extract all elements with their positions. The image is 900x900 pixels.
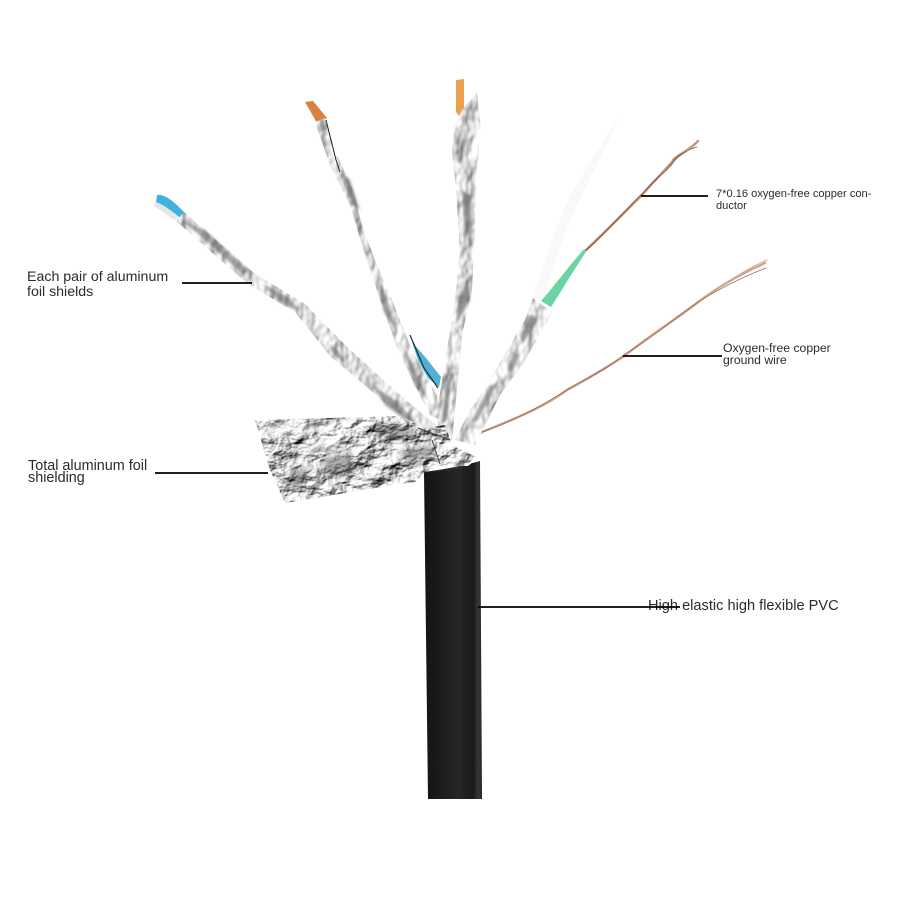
label: ground wire: ground wire xyxy=(723,353,787,367)
label: total aluminum foil shielding: Total aluminum foil xyxy=(28,458,147,474)
leader line: PVC xyxy=(478,606,680,608)
blue insulated wire sliver xyxy=(410,335,441,388)
foil-shielded pair: left xyxy=(176,212,436,432)
label: ground wire: Oxygen-free copper xyxy=(723,341,831,355)
leader line: copper conductor xyxy=(641,195,708,197)
copper ground wire xyxy=(480,260,767,433)
label: copper conductor: ductor xyxy=(716,200,747,212)
leader line: ground wire xyxy=(623,355,722,357)
label: copper conductor: 7*0.16 oxygen-free copper con- xyxy=(716,188,872,200)
wire tip: blue xyxy=(154,195,184,220)
wire tip: orange top xyxy=(456,79,464,116)
label: total aluminum foil shielding: shielding xyxy=(28,470,85,486)
label: each pair of aluminum foil shields xyxy=(27,269,168,300)
total aluminum foil xyxy=(255,416,478,503)
wire tip: orange left xyxy=(305,101,327,123)
copper conductor strand xyxy=(584,141,698,252)
PVC jacket xyxy=(424,461,482,799)
label: each pair of aluminum foil shields: Each pair of aluminum xyxy=(27,269,168,285)
foil-shielded pair: top xyxy=(438,93,481,440)
label: ground wire xyxy=(723,341,831,367)
label: PVC: High elastic high flexible PVC xyxy=(648,598,839,614)
white wire, faint xyxy=(532,112,621,303)
leader line: foil shields xyxy=(182,282,252,284)
leader line: total foil xyxy=(155,472,268,474)
label: total aluminum foil shielding xyxy=(28,458,147,486)
label: copper conductor xyxy=(716,188,872,212)
foil-shielded pair: right xyxy=(455,298,552,445)
foil-shielded pair: upper left xyxy=(315,118,440,420)
green insulated wire xyxy=(541,249,586,307)
label: each pair of aluminum foil shields: foil shields xyxy=(27,284,93,300)
